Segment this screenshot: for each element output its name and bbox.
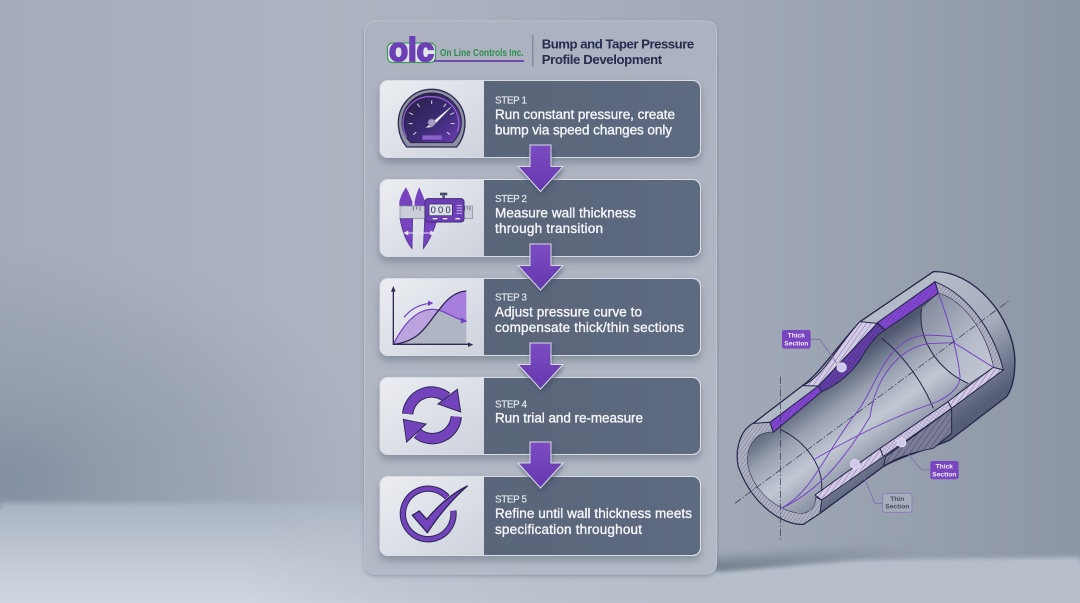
tube body [737, 272, 1015, 524]
step 5 text [495, 495, 692, 537]
logo: On Line Controls Inc. [388, 31, 524, 68]
heading: Profile Development [542, 52, 663, 67]
step 4 text [495, 399, 643, 426]
upper wall section [770, 282, 938, 432]
callout: thin section: Thin [890, 496, 904, 503]
step 5 text: specification throughout [495, 522, 642, 537]
tube interior [748, 293, 993, 513]
step 4 text: STEP 4 [495, 399, 528, 410]
step 3 card [380, 278, 700, 356]
icon: caliper [399, 187, 473, 249]
step 4 text: Run trial and re-measure [495, 411, 643, 426]
step 1 card [380, 80, 700, 158]
icon: pressure gauge [398, 89, 465, 147]
step 3 text: STEP 3 [495, 293, 528, 304]
callout: thin section: Section [885, 504, 909, 511]
center axis [735, 300, 1010, 503]
step 1 text [495, 96, 675, 137]
callout: thick section bottom: Section [932, 471, 956, 478]
callout: thick section top: Thick [788, 333, 805, 340]
step 3 text: Adjust pressure curve to [495, 304, 642, 320]
step 2 text: Measure wall thickness [495, 205, 636, 220]
step 3 text: compensate thick/thin sections [495, 320, 684, 335]
step 1 text: bump via speed changes only [495, 122, 672, 137]
step 2 text [495, 194, 636, 236]
step 5 text: Refine until wall thickness meets [495, 506, 692, 521]
icon: caliper: 000 [431, 205, 451, 215]
icon: check mark [403, 486, 467, 539]
icon: pressure curve chart [391, 286, 473, 347]
illustration: cutaway tube [735, 272, 1015, 540]
step 5 text: STEP 5 [495, 495, 528, 506]
arrow: step 3 to 4 [518, 343, 563, 389]
icon: refresh cycle [403, 389, 461, 442]
arrow: step 4 to 5 [518, 442, 563, 488]
left end ring [737, 422, 822, 524]
step 2 card [380, 180, 700, 256]
arrow: step 1 to 2 [518, 145, 563, 192]
logo: On Line Controls Inc.: On Line Controls Inc. [440, 47, 524, 59]
step 5 card [380, 476, 700, 556]
logo: On Line Controls Inc.: olc [389, 31, 434, 68]
vertical axis [779, 377, 781, 540]
panel: process steps [364, 21, 716, 574]
heading: Bump and Taper Pressure [542, 36, 694, 52]
step 2 text: through transition [495, 221, 603, 236]
divider [532, 35, 534, 67]
lower wall section [815, 367, 1003, 500]
callout: thick section bottom [930, 461, 959, 479]
heading [542, 36, 694, 67]
step 2 text: STEP 2 [495, 194, 527, 205]
right end ring [935, 282, 1003, 370]
callout: thick section top: Section [784, 340, 808, 347]
pressure curves [782, 293, 993, 508]
callout: thin section [883, 493, 912, 512]
far opening [921, 293, 993, 383]
leader lines [811, 339, 930, 503]
step 3 text [495, 293, 684, 335]
callout: thick section top [782, 330, 811, 349]
step 4 card [380, 378, 700, 454]
step 1 text: STEP 1 [495, 96, 527, 106]
near opening [780, 429, 822, 490]
callout: thick section bottom: Thick [936, 464, 953, 471]
step 1 text: Run constant pressure, create [495, 107, 675, 122]
marker dots [837, 363, 906, 469]
arrow: step 2 to 3 [518, 244, 563, 290]
